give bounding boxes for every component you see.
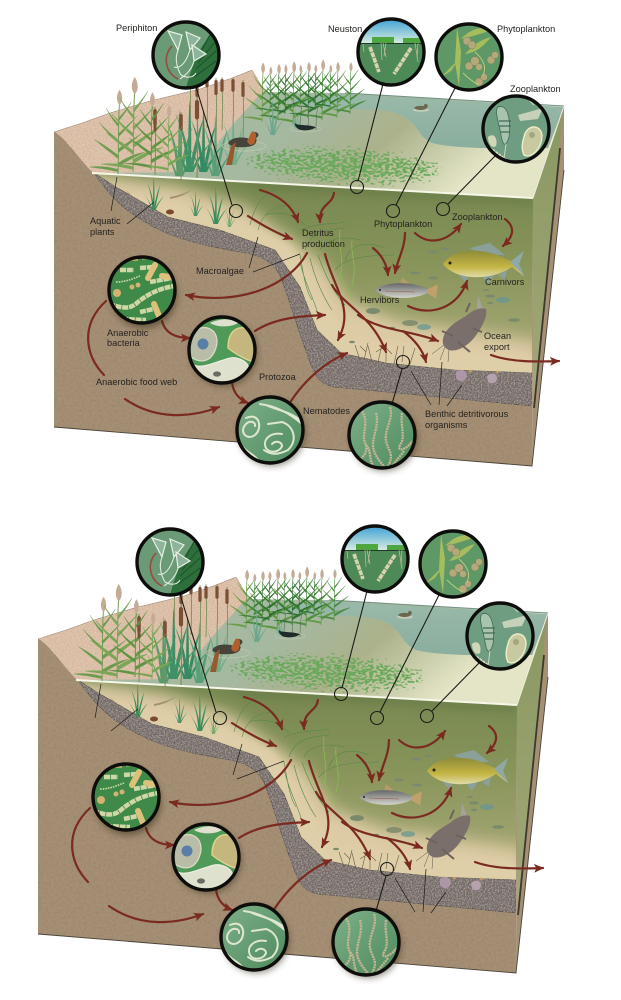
- inset: protozoa: [171, 824, 241, 890]
- catfish: [416, 803, 470, 869]
- coot on water: [291, 123, 321, 132]
- inset: protozoa: [187, 317, 257, 383]
- grebe: [222, 131, 266, 165]
- leader lines and target rings: [95, 591, 480, 913]
- distant duck: [397, 611, 413, 619]
- grebe: [206, 638, 250, 672]
- inset: neuston: [358, 19, 424, 85]
- text labels: Periphiton: [116, 23, 157, 33]
- inset: phytoplankton: [420, 531, 486, 597]
- inset: periphiton: [137, 529, 203, 595]
- panel: labelled ecosystem diagram: [54, 19, 564, 471]
- sediment block: soil cross-section: [38, 613, 548, 973]
- benthic organisms: [456, 370, 498, 383]
- benthic organisms: [440, 877, 482, 890]
- text labels: Hervibors: [360, 295, 400, 305]
- carnivore fish: [427, 750, 508, 791]
- text labels: Benthic detritivorous: [425, 409, 509, 419]
- herbivore fish: [359, 784, 422, 805]
- water surface with duckweed: [92, 92, 564, 198]
- text labels: Zooplankton: [510, 84, 561, 94]
- text labels: Carnivors: [485, 277, 525, 287]
- inset: anaerobic bacteria: [93, 764, 159, 830]
- cattails: [153, 68, 249, 180]
- inset: zooplankton: [467, 603, 533, 669]
- emergent reeds at back of pond: [242, 60, 366, 135]
- emergent reeds at back of pond: [226, 567, 350, 642]
- sandy shore terrain: [38, 577, 249, 683]
- text labels: Phytoplankton: [497, 24, 555, 34]
- tall reeds on left shore: [74, 584, 173, 681]
- text labels: Nematodes: [303, 406, 350, 416]
- text labels: production: [302, 239, 345, 249]
- inset: anaerobic bacteria: [109, 257, 175, 323]
- inset: periphiton: [153, 22, 219, 88]
- water column with sandy bed: [85, 172, 540, 390]
- text labels: [90, 23, 561, 430]
- flow arrows: [72, 697, 543, 922]
- pebbles: [333, 755, 504, 850]
- water surface with duckweed: [76, 599, 548, 705]
- text labels: Neuston: [328, 24, 362, 34]
- coot on water: [275, 630, 305, 639]
- pebbles: [349, 248, 520, 343]
- submerged plants and macroalgae: [110, 683, 399, 871]
- text labels: Detritus: [302, 228, 334, 238]
- distant duck: [413, 104, 429, 112]
- sandy shore terrain: [54, 70, 265, 176]
- text labels: Zooplankton: [452, 212, 503, 222]
- inset: neuston: [342, 526, 408, 592]
- water column with sandy bed: [69, 679, 524, 897]
- text labels: Phytoplankton: [374, 219, 432, 229]
- cattails: [137, 575, 233, 687]
- dark gravel sediment layer: [94, 173, 532, 406]
- submerged plants and macroalgae: [126, 176, 415, 364]
- panel: unlabelled ecosystem diagram: [38, 526, 548, 978]
- text labels: export: [484, 342, 510, 352]
- text labels: Macroalgae: [196, 266, 244, 276]
- sediment block: soil cross-section: [54, 106, 564, 466]
- inset: phytoplankton: [436, 24, 502, 90]
- text labels: Protozoa: [259, 372, 297, 382]
- flow arrows: [88, 190, 559, 415]
- herbivore fish: [375, 277, 438, 298]
- circle shadows: [95, 769, 401, 978]
- tall reeds on left shore: [90, 77, 189, 174]
- inset: nematodes: [237, 397, 303, 463]
- text labels: bacteria: [107, 338, 141, 348]
- text labels: organisms: [425, 420, 468, 430]
- inset: benthic filaments: [333, 909, 399, 976]
- circle shadows: [111, 262, 417, 471]
- text labels: plants: [90, 227, 115, 237]
- text labels: Aquatic: [90, 216, 121, 226]
- leader lines and target rings: [111, 84, 496, 406]
- text labels: Anaerobic food web: [96, 377, 177, 387]
- inset: benthic filaments: [349, 402, 415, 469]
- catfish: [432, 296, 486, 362]
- inset: zooplankton: [483, 96, 549, 162]
- inset: nematodes: [221, 904, 287, 970]
- dark gravel sediment layer: [78, 680, 516, 913]
- carnivore fish: [443, 243, 524, 284]
- text labels: Anaerobic: [107, 328, 149, 338]
- text labels: Ocean: [484, 331, 511, 341]
